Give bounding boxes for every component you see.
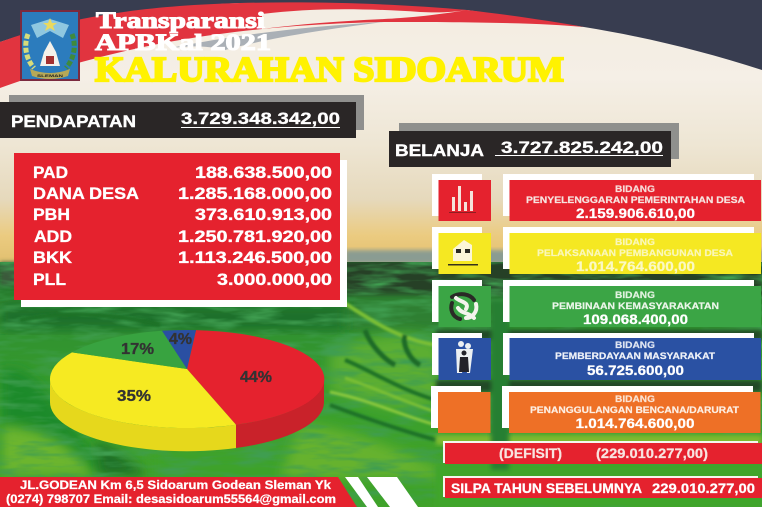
panel: income sources: PLL (33, 270, 66, 289)
panel: income sources: BKK (33, 248, 73, 267)
pie chart: 4% (169, 331, 192, 348)
title line: Transparansi: Transparansi (96, 8, 266, 33)
slice: yellow 35% (50, 352, 236, 428)
row: defisit (443, 441, 762, 464)
pie chart: 17% (121, 341, 154, 358)
panel: income sources: 188.638.500,00 (195, 163, 332, 182)
row: pembinaan kemasyarakatan: PEMBINAAN KEMASYARAKATAN (552, 301, 719, 311)
row: penyelenggaran pemerintahan desa (432, 174, 761, 221)
row: silpa tahun sebelumnya: SILPA TAHUN SEBELUMNYA (451, 481, 642, 496)
icon: community circle (451, 294, 476, 319)
slice: blue 4% (162, 330, 196, 369)
row: pelaksanaan pembangunan desa: BIDANG (615, 237, 655, 247)
pie chart: 44% (240, 369, 272, 386)
panel: pendapatan total: PENDAPATAN (11, 112, 136, 131)
panel: income sources: PAD (33, 163, 68, 182)
title (95, 8, 564, 89)
row: pemberdayaan masyarakat: BIDANG (615, 340, 655, 350)
row: defisit: (DEFISIT) (499, 446, 562, 461)
panel: belanja total (389, 123, 679, 167)
panel: pendapatan total (0, 95, 364, 138)
row: pemberdayaan masyarakat: PEMBERDAYAAN MASYARAKAT (555, 351, 716, 361)
row: pelaksanaan pembangunan desa (432, 227, 761, 274)
footer: address and contact: JL.GODEAN Km 6,5 Sidoarum Godean Sleman Yk (20, 478, 331, 492)
panel: income sources: 3.000.000,00 (217, 270, 332, 289)
logo: Sleman crest: SLEMAN (37, 73, 63, 78)
row: pembinaan kemasyarakatan (432, 280, 761, 327)
panel: belanja total: 3.727.825.242,00 (501, 138, 663, 157)
icon: star (43, 18, 57, 31)
footer: address and contact: (0274) 798707 Email: desasidoarum55564@gmail.com (6, 492, 336, 506)
pie chart (50, 330, 324, 451)
row: penyelenggaran pemerintahan desa: BIDANG (615, 184, 655, 194)
row: defisit: (229.010.277,00) (596, 446, 708, 461)
row: penyelenggaran pemerintahan desa: PENYELENGGARAN PEMERINTAHAN DESA (526, 195, 746, 205)
panel: income sources: 373.610.913,00 (195, 205, 332, 224)
panel: income sources (14, 153, 347, 307)
panel: income sources: 1.113.246.500,00 (178, 248, 332, 267)
row: pemberdayaan masyarakat (432, 333, 761, 380)
panel: pendapatan total: 3.729.348.342,00 (181, 109, 340, 128)
row: silpa tahun sebelumnya (443, 476, 762, 498)
logo: Sleman crest (21, 11, 79, 80)
slice: green 17% (72, 331, 187, 369)
row: pembinaan kemasyarakatan: 109.068.400,00 (583, 312, 688, 327)
title line: APBKal 2021: APBKal 2021 (95, 30, 271, 55)
slice: red 44% (187, 330, 324, 425)
header swoosh: dark band and red ribbon (0, 0, 762, 88)
row: silpa tahun sebelumnya: 229.010.277,00 (652, 481, 755, 496)
row: penanggulangan bencana/darurat (431, 386, 760, 433)
panel: income sources: DANA DESA (33, 184, 139, 203)
row: penanggulangan bencana/darurat: PENANGGULANGAN BENCANA/DARURAT (530, 405, 740, 415)
pie chart: 35% (117, 388, 151, 405)
row: pelaksanaan pembangunan desa: PELAKSANAAN PEMBANGUNAN DESA (537, 248, 734, 258)
icon: family (456, 341, 473, 373)
icon: bar chart (449, 186, 476, 213)
row: penyelenggaran pemerintahan desa: 2.159.906.610,00 (576, 206, 695, 221)
row: pembinaan kemasyarakatan: BIDANG (615, 290, 655, 300)
title line: Kalurahan Sidoarum: KALURAHAN SIDOARUM (95, 50, 564, 89)
icon: house (448, 240, 478, 266)
row: pemberdayaan masyarakat: 56.725.600,00 (587, 363, 684, 378)
panel: income sources: ADD (34, 227, 72, 246)
row: penanggulangan bencana/darurat: 1.014.764.600,00 (576, 416, 694, 431)
row: penanggulangan bencana/darurat: BIDANG (615, 394, 655, 404)
panel: income sources: PBH (33, 205, 70, 224)
row: pelaksanaan pembangunan desa: 1.014.764.600,00 (576, 259, 695, 274)
footer: address and contact (0, 477, 357, 507)
footer stripes (345, 477, 418, 507)
panel: belanja total: BELANJA (395, 141, 484, 160)
panel: income sources: 1.285.168.000,00 (178, 184, 332, 203)
panel: income sources: 1.250.781.920,00 (178, 227, 332, 246)
